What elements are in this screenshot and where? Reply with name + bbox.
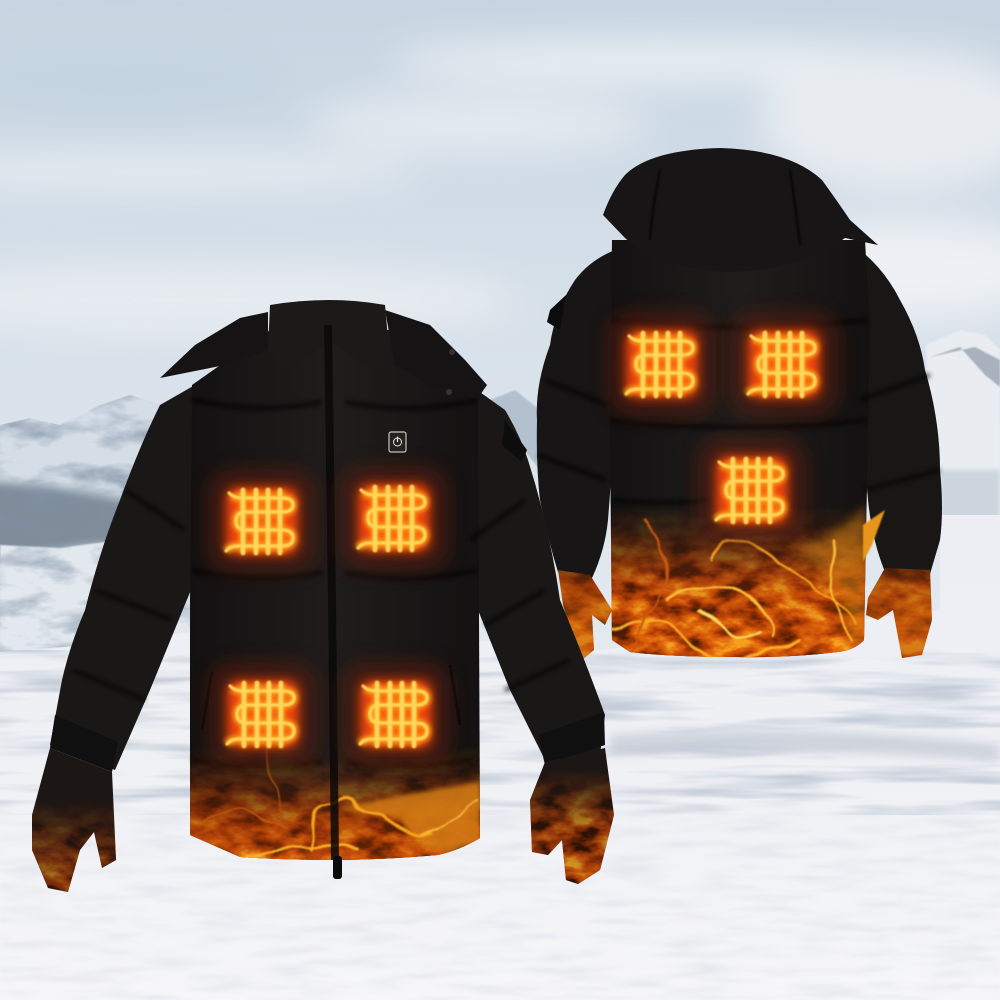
back torso [610,240,870,657]
back right glove [866,568,932,658]
front pockets [202,665,460,730]
power button [389,432,406,452]
front right glove [530,748,614,884]
heater: chest right [340,466,448,570]
back hood [603,148,878,272]
front torso [190,330,480,860]
snap buttons [446,349,455,395]
flame tip [863,510,885,562]
heater: back upper left [608,312,716,416]
back jacket [537,148,942,660]
front right cuff [538,712,605,765]
front left glove [32,748,116,892]
front right sleeve [460,385,605,760]
back flames [605,505,870,660]
front hood right [385,310,487,398]
heater: chest left [208,469,316,573]
front flames [185,745,485,865]
front hood left [160,312,268,378]
left mountains [0,395,190,652]
centre mountains [490,390,540,470]
back quilting lines [538,320,940,502]
front zipper [328,325,335,860]
back right sleeve [860,250,942,574]
front jacket [32,300,614,892]
heater: pocket right [342,662,450,766]
front collar [268,300,390,372]
heater: back upper right [730,312,838,416]
right sleeve strap [502,420,527,462]
back left pocket flap [547,295,566,330]
back left sleeve [537,250,615,578]
heater: pocket left [209,662,317,766]
front left cuff [50,715,118,772]
front left sleeve [50,385,195,770]
front quilting lines [72,400,570,766]
right mountains [926,330,1000,520]
heater: back lower [698,438,806,542]
snow ground [0,515,1000,1000]
clouds [0,40,1000,336]
back left glove [558,570,612,660]
zipper pull [333,856,342,879]
